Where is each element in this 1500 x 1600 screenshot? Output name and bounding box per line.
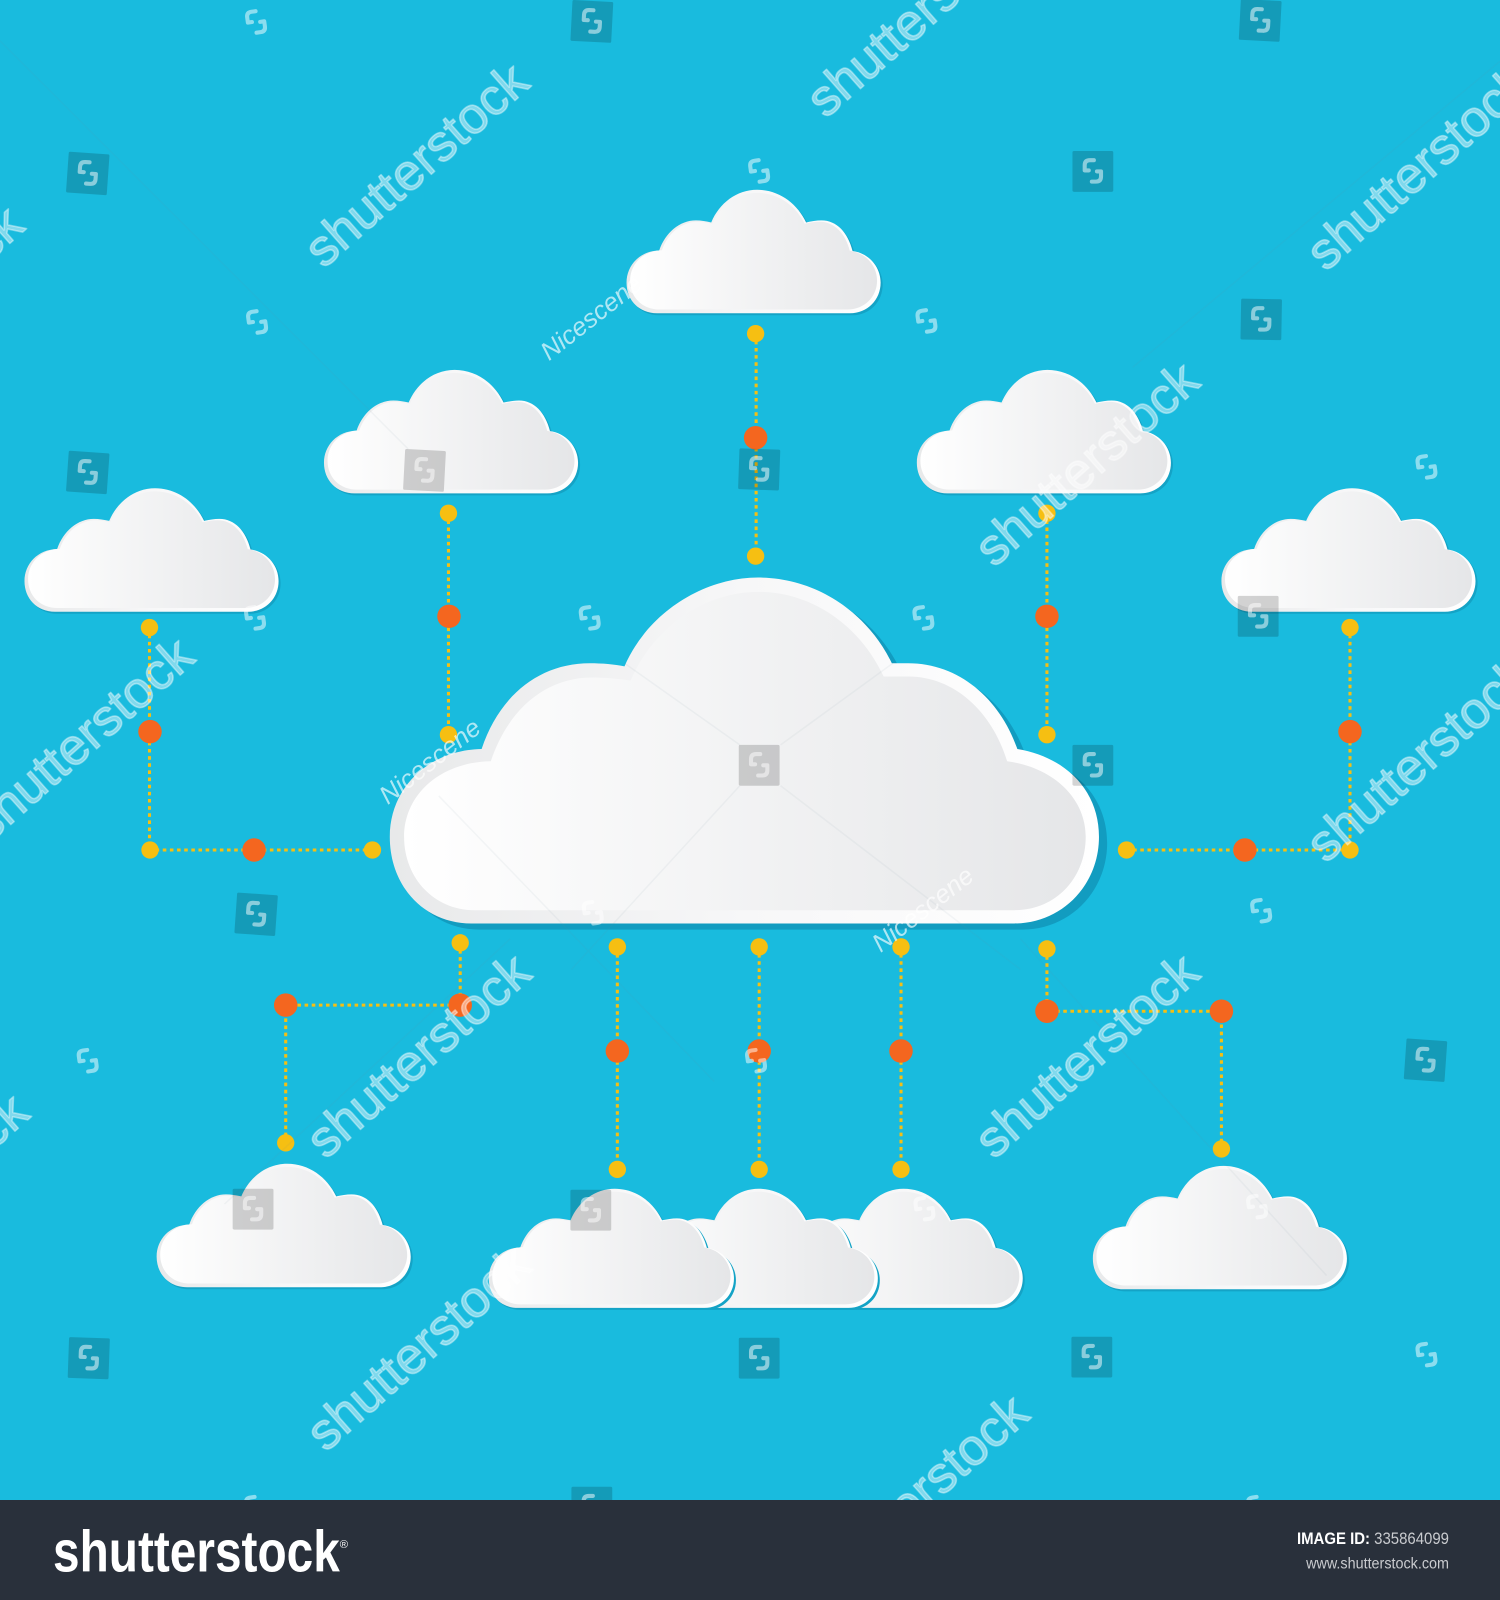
footer registered mark: ® xyxy=(340,1539,349,1551)
cloud: top xyxy=(627,190,883,315)
cloud: far left xyxy=(24,488,281,614)
connector: top cloud to main cloud xyxy=(744,325,767,565)
footer website: www.shutterstock.com xyxy=(1305,1555,1449,1572)
footer bar xyxy=(0,1500,1500,1600)
watermark: diagonal shutterstock text: shutterstock xyxy=(963,942,1210,1168)
connector: lower left cloud to main cloud xyxy=(274,934,472,1152)
connector: upper right cloud to main cloud xyxy=(1035,505,1059,743)
connector: upper left cloud to main cloud xyxy=(437,505,461,743)
cloud: upper left xyxy=(324,370,580,495)
watermark: diagonal Nicescene text: Nicescene xyxy=(374,714,486,810)
watermark: diagonal Nicescene text: Nicescene xyxy=(867,862,979,958)
cloud: lower left xyxy=(157,1164,413,1289)
connectors: bottom three vertical links xyxy=(606,938,913,1178)
watermark: diagonal Nicescene text xyxy=(374,270,979,958)
connector: far right cloud to main cloud xyxy=(1118,619,1362,862)
watermark: diagonal shutterstock text: shutterstock xyxy=(963,350,1210,577)
cloud: upper right xyxy=(917,370,1173,495)
main central cloud xyxy=(390,578,1107,930)
footer image id: IMAGE ID: 335864099 xyxy=(1297,1530,1449,1548)
watermark: diagonal Nicescene text: Nicescene xyxy=(535,270,648,366)
cloud: lower right xyxy=(1093,1166,1349,1291)
connector: lower right cloud to main cloud xyxy=(1035,940,1233,1158)
footer logo: shutterstock xyxy=(53,1519,340,1584)
clouds: overlapping bottom trio xyxy=(489,1189,1025,1310)
watermark: diagonal shutterstock text: shutterstock xyxy=(293,51,539,278)
watermark: diagonal shutterstock text: shutterstock xyxy=(295,1235,541,1461)
watermark: diagonal shutterstock text: shutterstock xyxy=(295,942,541,1168)
connector: far left cloud to main cloud xyxy=(138,619,381,862)
cloud: far right xyxy=(1221,488,1478,614)
